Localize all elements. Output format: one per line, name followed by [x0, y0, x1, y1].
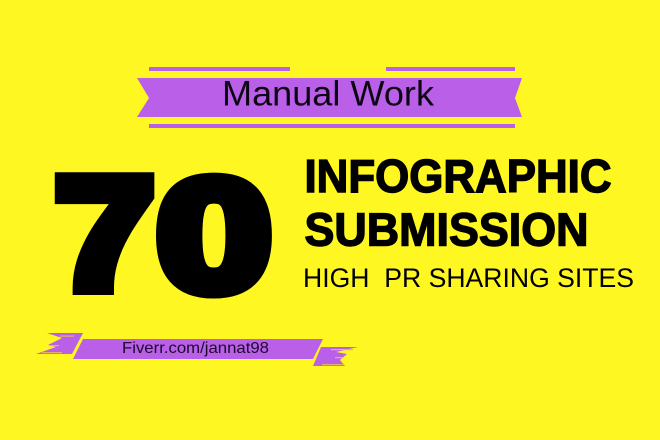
heading: [304, 150, 612, 256]
left ribbon flag: [36, 333, 83, 354]
footer text: Fiverr.com/jannat98: [122, 340, 269, 357]
heading: SUBMISSION: [304, 204, 588, 256]
footer ribbon: [73, 339, 323, 359]
big number 70: [55, 145, 271, 324]
subheading: HIGH PR SHARING SITES: [303, 263, 634, 293]
big number 70: 0: [157, 147, 271, 324]
big number 70: 7: [55, 145, 154, 322]
banner text: Manual Work: [222, 74, 435, 114]
right ribbon flag: [313, 347, 358, 366]
heading: INFOGRAPHIC: [304, 150, 612, 202]
top ribbon banner: [137, 67, 522, 128]
